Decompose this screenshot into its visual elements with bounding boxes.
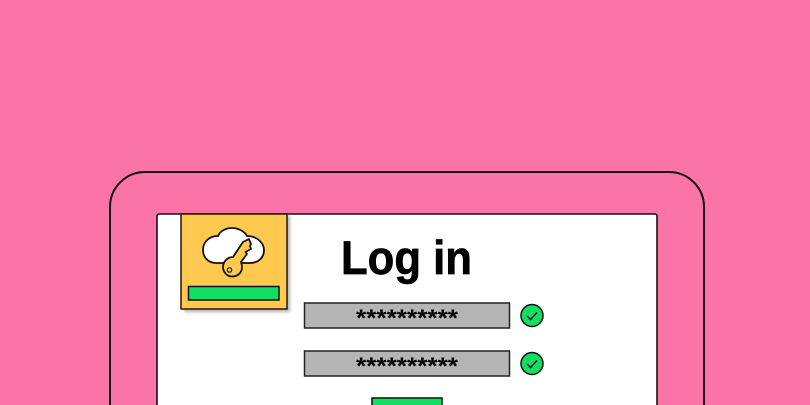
- panel: cloud key card: [181, 214, 290, 312]
- progress bar: [188, 286, 279, 300]
- password field 2: **********: [356, 353, 459, 380]
- panel: login screen: [157, 214, 657, 405]
- device frame: [110, 172, 704, 405]
- icon: cloud and key: [203, 228, 264, 276]
- password field 1: **********: [356, 305, 459, 332]
- submit button: [372, 398, 442, 405]
- password field 1: [304, 303, 510, 332]
- icon: check 2: [521, 352, 543, 374]
- password field 2: [304, 351, 510, 380]
- heading: Log in: Log in: [341, 231, 472, 284]
- icon: check 1: [521, 304, 543, 326]
